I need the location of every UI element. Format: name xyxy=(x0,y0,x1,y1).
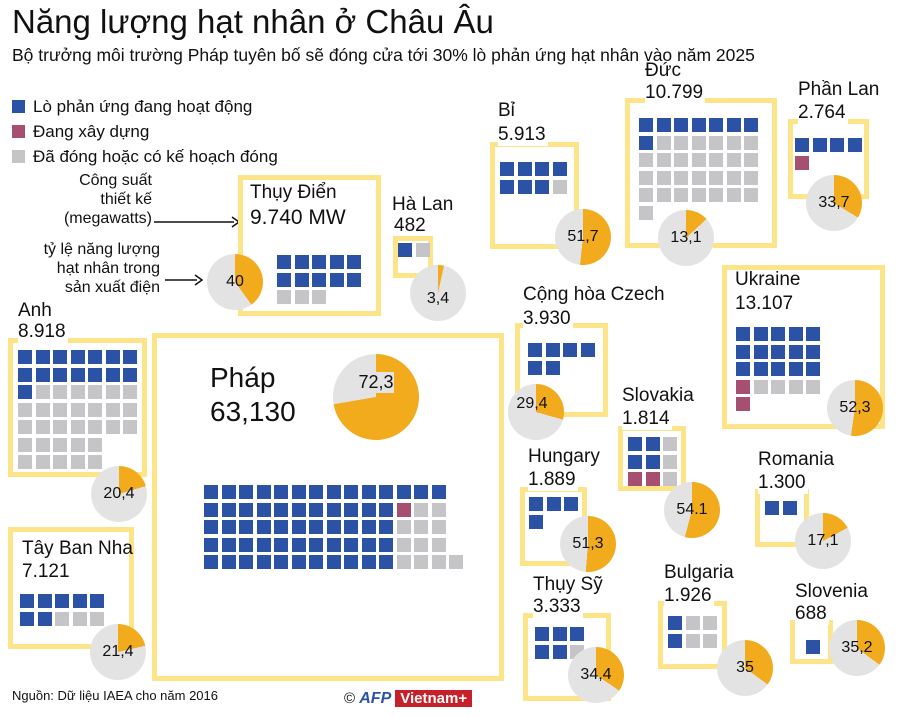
panel: Bulgaria xyxy=(658,562,773,696)
arrow: share xyxy=(165,274,203,286)
panel: Netherlands xyxy=(392,194,466,321)
text: Ukraine xyxy=(735,269,800,290)
text: 1.300 xyxy=(758,472,806,493)
annotation: capacity: (megawatts) xyxy=(64,210,152,227)
text: 1.814 xyxy=(622,408,670,429)
panel: Ukraine xyxy=(722,265,885,436)
arrow: capacity xyxy=(154,216,238,228)
text: 40 xyxy=(226,273,244,290)
text: Tây Ban Nha xyxy=(22,538,133,559)
text: 1.926 xyxy=(664,585,712,606)
annotation: share: sản xuất điện xyxy=(65,279,160,296)
text: Anh xyxy=(18,300,52,321)
annotation: share: tỷ lệ năng lượng xyxy=(44,241,160,258)
text: 10.799 xyxy=(645,82,703,103)
text: 3.930 xyxy=(523,308,571,329)
text: 9.740 MW xyxy=(250,206,346,229)
subtitle: Bộ trưởng môi trường Pháp tuyên bố sẽ đóng cửa tới 30% lò phản ứng hạt nhân vào năm 2025 xyxy=(12,45,755,65)
text: 72,3 xyxy=(358,372,394,392)
text: Phần Lan xyxy=(798,79,879,100)
text: 13.107 xyxy=(735,293,793,314)
text: 51,7 xyxy=(567,228,599,245)
panel: Slovenia xyxy=(790,581,885,676)
panel: Slovakia xyxy=(618,385,720,538)
text: 1.889 xyxy=(528,469,576,490)
panel: Czech xyxy=(508,284,665,440)
text: 29,4 xyxy=(516,395,548,412)
text: 8.918 xyxy=(18,321,66,342)
text: Bỉ xyxy=(498,100,515,121)
text: 52,3 xyxy=(839,399,871,416)
annotation: capacity: Công suất xyxy=(79,172,152,189)
text: Bulgaria xyxy=(664,562,734,583)
text: 34,4 xyxy=(580,666,612,683)
text: Hà Lan xyxy=(392,194,453,215)
logo: © AFP Vietnam+ xyxy=(344,690,467,707)
text: 51,3 xyxy=(572,535,604,552)
text: Slovenia xyxy=(795,581,868,602)
panel: Sweden xyxy=(207,175,381,316)
annotation: share xyxy=(44,241,160,296)
legend: Đã đóng hoặc có kế hoạch đóng xyxy=(33,147,278,166)
text: Thụy Sỹ xyxy=(533,574,603,595)
text: 13,1 xyxy=(670,229,702,246)
text: 54.1 xyxy=(676,501,708,518)
panel: Hungary xyxy=(520,446,616,572)
text: Thụy Điển xyxy=(250,182,337,203)
legend: Đang xây dựng xyxy=(33,122,149,141)
annotation: share: hạt nhân trong xyxy=(57,260,160,277)
legend xyxy=(12,97,278,166)
text: Slovakia xyxy=(622,385,694,406)
text: 21,4 xyxy=(102,643,134,660)
panel: UK xyxy=(8,300,147,522)
text: Cộng hòa Czech xyxy=(523,284,665,305)
panel: Finland xyxy=(788,79,879,231)
panel: Germany xyxy=(625,60,777,266)
title: Năng lượng hạt nhân ở Châu Âu xyxy=(12,3,494,40)
text: Đức xyxy=(645,60,681,81)
text: 5.913 xyxy=(498,124,546,145)
text: Hungary xyxy=(528,446,600,467)
panel: Belgium xyxy=(490,100,611,265)
text: 33,7 xyxy=(818,194,850,211)
text: 35,2 xyxy=(841,639,873,656)
text: 3,4 xyxy=(427,290,449,307)
annotation: capacity xyxy=(64,172,152,227)
text: 20,4 xyxy=(103,485,135,502)
text: 482 xyxy=(394,215,426,236)
panel: Spain xyxy=(8,527,146,680)
panel: Switzerland xyxy=(523,574,624,703)
text: 688 xyxy=(795,603,827,624)
annotation: capacity: thiết kế xyxy=(100,191,152,208)
text: Pháp xyxy=(210,362,275,393)
text: 7.121 xyxy=(22,561,70,582)
text: Romania xyxy=(758,449,834,470)
text: 63,130 xyxy=(210,396,296,427)
panel: France xyxy=(152,333,504,681)
source note: Nguồn: Dữ liệu IAEA cho năm 2016 xyxy=(12,688,218,703)
legend: Lò phản ứng đang hoạt động xyxy=(33,97,252,116)
panel: Romania xyxy=(755,449,851,569)
text: 35 xyxy=(736,659,754,676)
text: 3.333 xyxy=(533,596,581,617)
text: 17,1 xyxy=(807,532,839,549)
text: 2.764 xyxy=(798,102,846,123)
